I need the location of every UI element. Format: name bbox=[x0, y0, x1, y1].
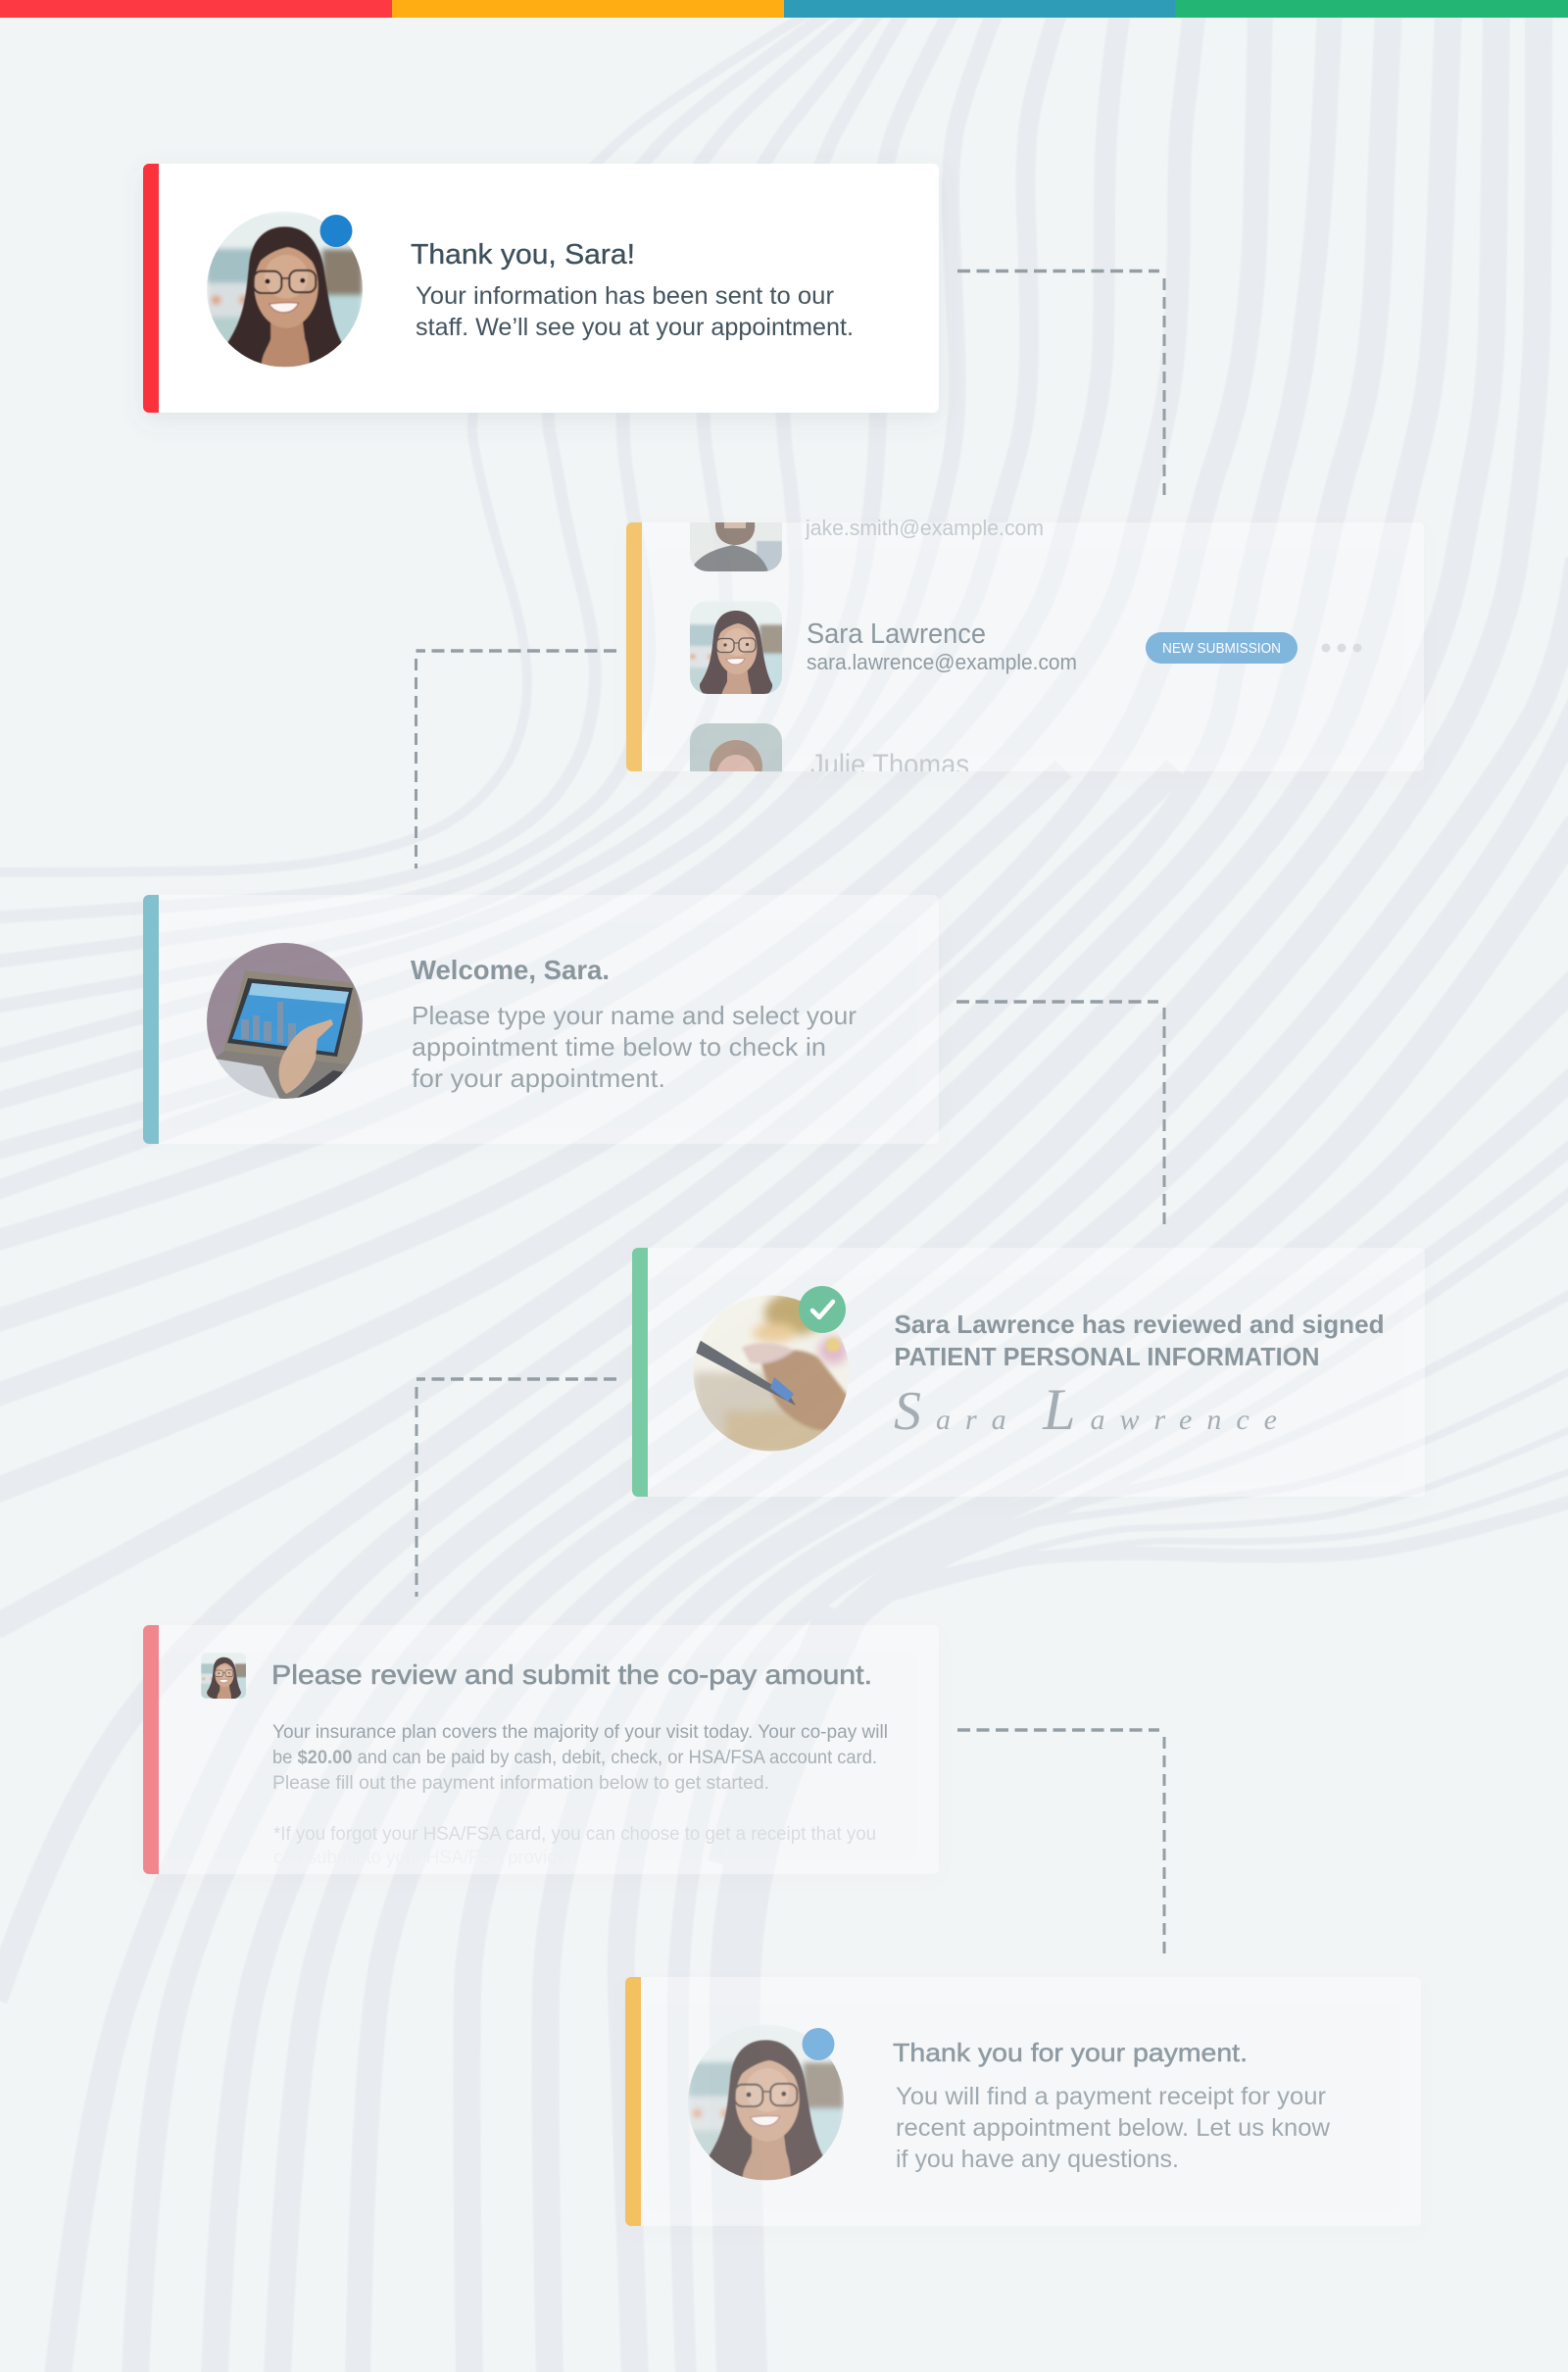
name: Julie Thomas: Julie Thomas bbox=[810, 749, 969, 781]
signed statement: PATIENT PERSONAL INFORMATION bbox=[894, 1342, 1319, 1371]
body text bbox=[416, 282, 854, 341]
image: hand with phone bbox=[692, 1292, 853, 1456]
heading: Thank you, Sara! bbox=[411, 239, 635, 271]
avatar: Julie bbox=[690, 723, 782, 771]
avatar: Sara portrait faded bbox=[688, 2025, 844, 2180]
signature: S ara L awrence bbox=[894, 1377, 1277, 1442]
body text: be $20.00 and can be paid by cash, debit, check, or HSA/FSA account card. bbox=[272, 1748, 877, 1768]
panel: welcome bbox=[143, 895, 857, 1144]
body text bbox=[412, 1001, 857, 1093]
top colour bar bbox=[0, 0, 1568, 18]
body text: staff. We’ll see you at your appointment. bbox=[416, 314, 854, 341]
heading: Thank you for your payment. bbox=[893, 2038, 1248, 2067]
avatar: Sara portrait bbox=[207, 212, 363, 367]
signed statement: Sara Lawrence has reviewed and signed bbox=[894, 1310, 1384, 1339]
footnote: can submit to your HSA/FSA provider. bbox=[273, 1848, 577, 1868]
connector: card 5 to card 6 bbox=[957, 1730, 1164, 1955]
accent bar: amber bbox=[625, 1977, 641, 2226]
list rows bbox=[690, 522, 1362, 771]
image: tablet check-in bbox=[202, 943, 367, 1100]
body text: recent appointment below. Let us know bbox=[896, 2114, 1331, 2142]
footnote: *If you forgot your HSA/FSA card, you can choose to get a receipt that you bbox=[273, 1824, 876, 1845]
accent bar: green bbox=[632, 1248, 648, 1497]
body text: Please fill out the payment information below to get started. bbox=[272, 1773, 769, 1794]
panel: thank you, Sara bbox=[143, 164, 939, 413]
heading: Welcome, Sara. bbox=[411, 955, 610, 985]
panel: signature review bbox=[632, 1248, 1425, 1497]
connector: card 4 to card 5 bbox=[416, 1379, 616, 1597]
body text: if you have any questions. bbox=[896, 2146, 1179, 2173]
body text: Your information has been sent to our bbox=[416, 282, 834, 310]
avatar: Jake bbox=[690, 522, 782, 571]
footnote bbox=[273, 1824, 876, 1868]
badge: check mark bbox=[799, 1286, 846, 1333]
body text: appointment time below to check in bbox=[412, 1032, 826, 1062]
menu dots bbox=[1321, 643, 1362, 653]
panel: payment thanks bbox=[625, 1977, 1330, 2226]
badge: new submission: NEW SUBMISSION bbox=[1162, 640, 1281, 657]
body text: Please type your name and select your bbox=[412, 1001, 857, 1030]
body text bbox=[272, 1722, 888, 1794]
badge: new submission bbox=[1146, 632, 1298, 664]
status dot bbox=[802, 2028, 835, 2060]
heading: Please review and submit the co-pay amount. bbox=[271, 1659, 872, 1690]
status dot bbox=[319, 215, 353, 247]
jake email: jake.smith@example.com bbox=[805, 516, 1044, 540]
avatar: small Sara thumbnail bbox=[201, 1653, 247, 1699]
panel: co-pay review bbox=[143, 1625, 939, 1874]
connector: card 1 to card 2 bbox=[957, 271, 1164, 497]
accent bar: teal bbox=[143, 895, 159, 1144]
signed statement bbox=[894, 1310, 1384, 1371]
accent bar: pink bbox=[143, 1625, 159, 1874]
body text: Your insurance plan covers the majority of your visit today. Your co-pay will bbox=[272, 1722, 888, 1743]
body text: You will find a payment receipt for your bbox=[896, 2083, 1326, 2110]
email: Sara: sara.lawrence@example.com bbox=[807, 650, 1077, 674]
connector: card 3 to card 4 bbox=[956, 1002, 1164, 1226]
connector: card 2 to card 3 bbox=[416, 651, 616, 868]
body text: for your appointment. bbox=[412, 1063, 665, 1093]
body text bbox=[896, 2083, 1331, 2173]
accent bar: red bbox=[143, 164, 159, 413]
avatar: Sara bbox=[690, 602, 782, 694]
name: Sara Lawrence: Sara Lawrence bbox=[807, 618, 986, 650]
accent bar: yellow bbox=[626, 522, 642, 771]
panel: submissions list bbox=[626, 519, 1362, 771]
